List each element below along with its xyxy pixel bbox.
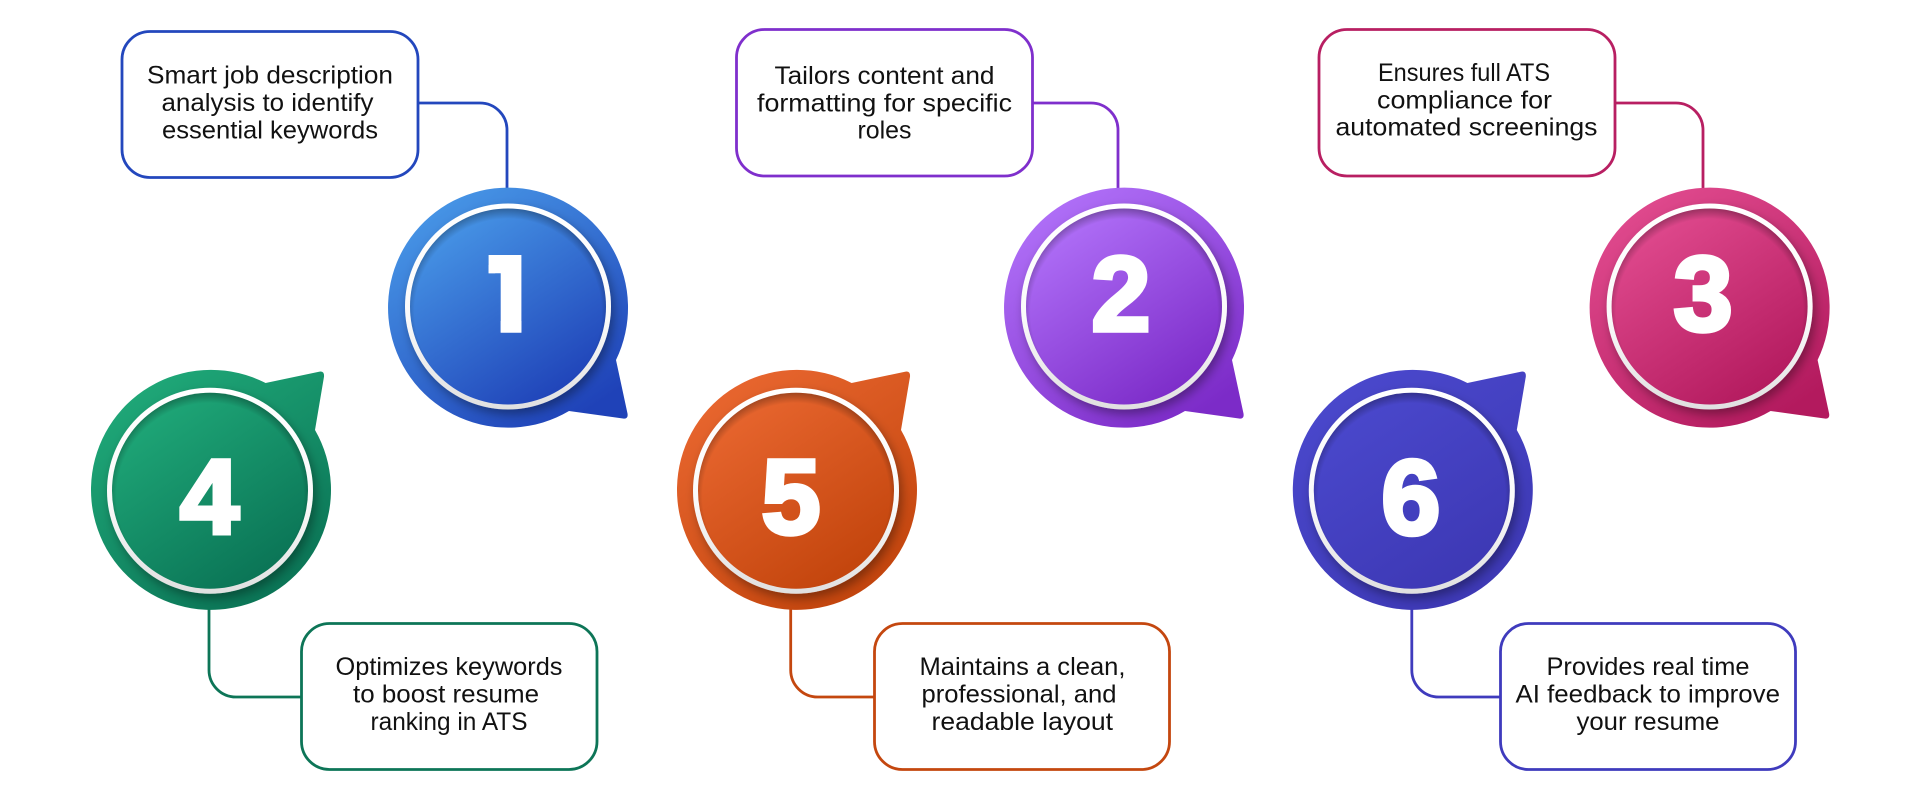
text box 3: compliance for [1377,86,1552,114]
panel: step 6 [1293,370,1796,770]
text box 4: ranking in ATS [370,708,528,736]
connector 4 [209,608,302,697]
text box 1: essential keywords [162,116,378,144]
text box 3: Ensures full ATS [1378,59,1550,87]
panel: step 1 [122,32,628,428]
text box 6: Provides real time [1546,653,1750,681]
badge 6 [1293,370,1533,610]
connector 1 [418,103,507,190]
text box 3 [1319,30,1615,176]
badge 1: 1 [477,232,539,357]
text box 6 [1500,624,1796,770]
badge 4 [91,370,331,610]
badge 1 [388,188,628,428]
panel: step 3 [1319,30,1830,428]
connector 2 [1032,103,1118,190]
text box 6: your resume [1576,708,1720,736]
text box 2: roles [858,116,912,144]
badge 2: 2 [1092,236,1150,354]
text box 2 [736,30,1032,176]
panel: step 4 [91,370,597,770]
badge 2 [1004,188,1244,428]
text box 2: formatting for specific [757,90,1012,118]
connector 5 [791,608,875,697]
badge 3: 3 [1674,236,1733,354]
panel: step 5 [677,370,1170,770]
text box 6: AI feedback to improve [1516,680,1780,708]
text box 4 [302,624,597,770]
badge 5 [677,370,917,610]
connector 3 [1614,103,1703,190]
text box 3: automated screenings [1336,114,1598,142]
badge 3 [1590,188,1830,428]
text box 1: analysis to identify [162,89,374,117]
connector 6 [1412,608,1501,697]
text box 4: to boost resume [353,680,539,708]
text box 1 [122,32,418,178]
text box 4: Optimizes keywords [336,653,562,681]
panel: step 2 [736,30,1244,428]
text box 2: Tailors content and [774,62,994,90]
text box 5: professional, and [922,680,1116,708]
badge 4: 4 [180,439,239,557]
text box 5: Maintains a clean, [920,653,1126,681]
text box 1: Smart job description [147,62,393,90]
badge 6: 6 [1381,439,1440,557]
badge 5: 5 [762,439,820,557]
text box 5: readable layout [932,708,1113,736]
text box 5 [874,624,1170,770]
